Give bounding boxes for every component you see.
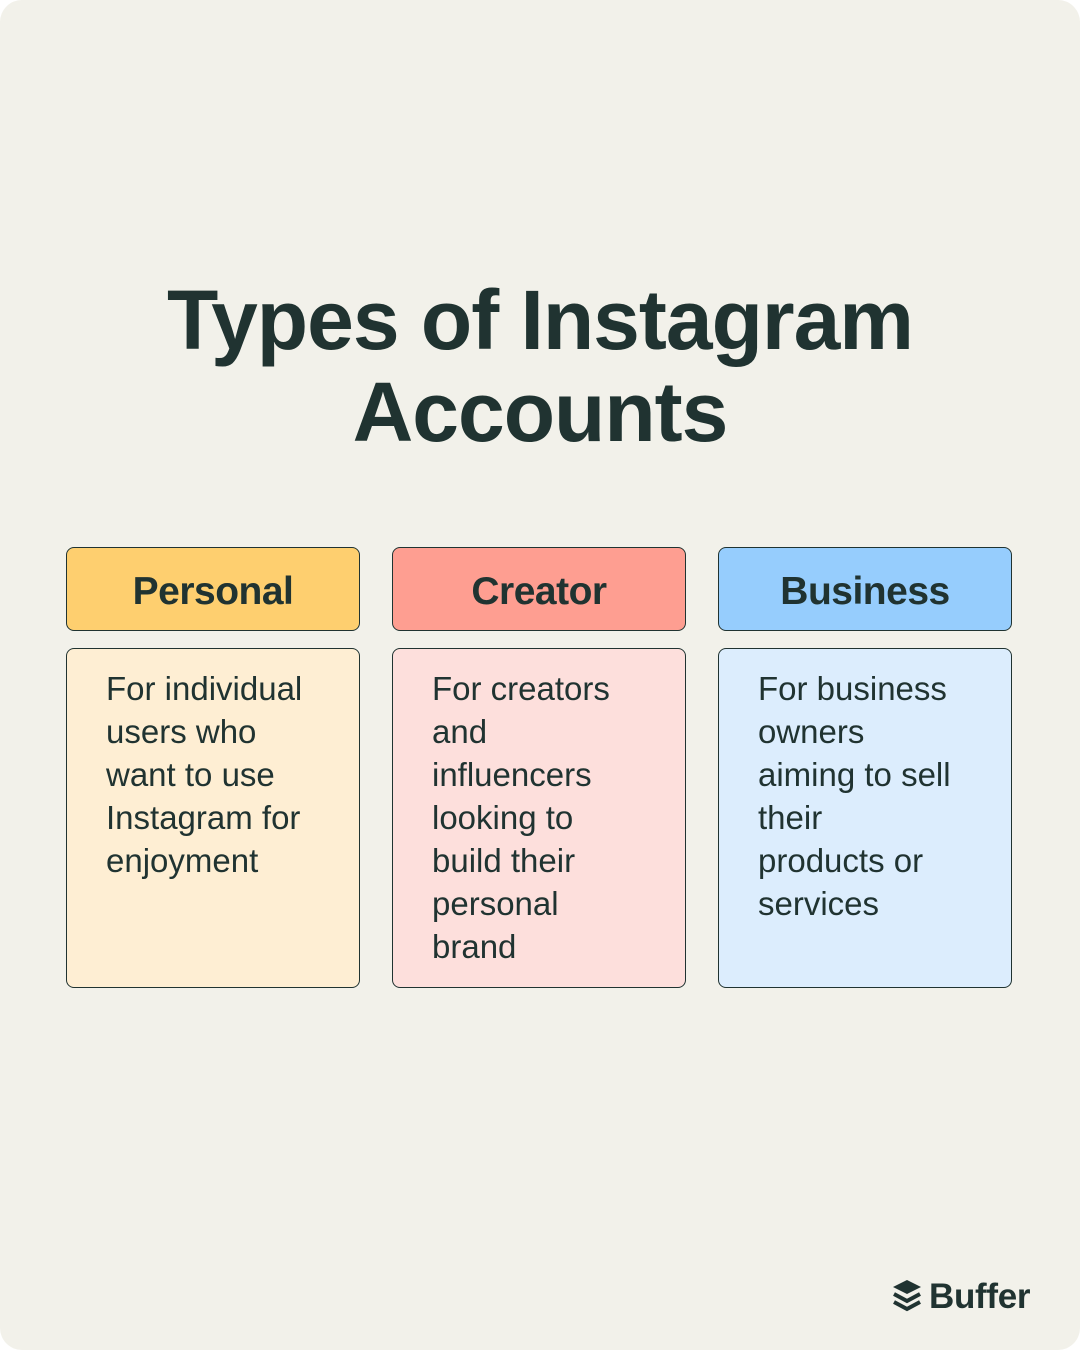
text: Personal description: For individual xyxy=(106,670,302,707)
text: Creator description xyxy=(392,648,686,988)
text: Personal description: Instagram for xyxy=(106,799,300,836)
logo: Buffer: Buffer xyxy=(929,1277,1030,1316)
text: Creator description: influencers xyxy=(432,756,592,793)
header: Creator: Creator xyxy=(471,570,607,612)
text: Business description xyxy=(718,648,1012,988)
text: Creator description: For creators xyxy=(432,670,610,707)
title: Accounts xyxy=(353,365,727,459)
header: Business: Business xyxy=(780,570,950,612)
header: Business xyxy=(718,547,1012,631)
text: Business description: owners xyxy=(758,713,864,750)
text: Creator description: personal xyxy=(432,885,559,922)
text: Personal description xyxy=(66,648,360,988)
title: Types of Instagram xyxy=(167,273,913,367)
text: Business description: their xyxy=(758,799,822,836)
text: Business description: aiming to sell xyxy=(758,756,951,793)
text: Creator description: and xyxy=(432,713,487,750)
header: Creator xyxy=(392,547,686,631)
header: Personal: Personal xyxy=(133,570,293,612)
text: Creator description: looking to xyxy=(432,799,573,836)
text: Creator description: brand xyxy=(432,928,516,965)
text: Personal description: want to use xyxy=(106,756,275,793)
text: Personal description: enjoyment xyxy=(106,842,258,879)
title xyxy=(167,273,913,459)
header: Personal xyxy=(66,547,360,631)
text: Personal description: users who xyxy=(106,713,256,750)
text: Creator description: build their xyxy=(432,842,575,879)
text: Business description: products or xyxy=(758,842,923,879)
text: Business description: services xyxy=(758,885,879,922)
text: Business description: For business xyxy=(758,670,947,707)
